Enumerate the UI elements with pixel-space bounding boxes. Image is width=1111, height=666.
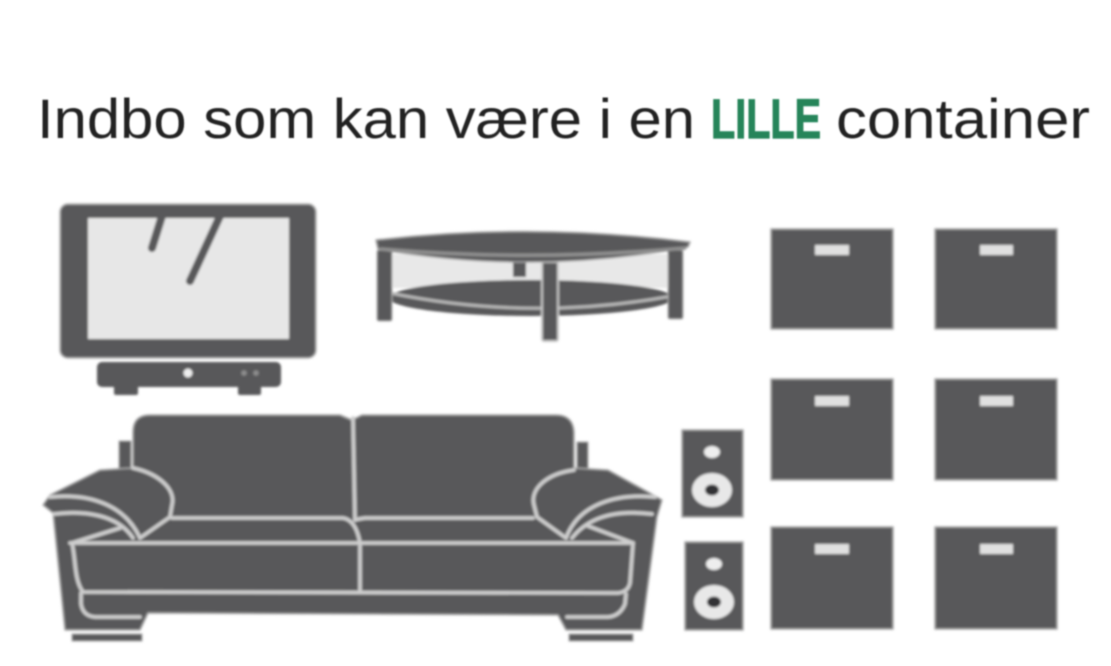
sofa silhouette [43,415,662,630]
title: LILLE [711,87,821,150]
sofa upholstery lines [50,418,655,617]
icon: television with media player [60,204,316,395]
box 2 [935,229,1057,329]
sofa feet [72,634,633,641]
title: Indbo som kan være i en [37,87,695,150]
box 1 [771,229,893,329]
icon: upper speaker [682,430,743,517]
icon: oval coffee table [376,231,690,341]
sofa side posts [119,441,588,474]
icon: lower speaker [685,542,743,630]
icon: sofa [43,415,662,641]
box 6 [935,527,1057,629]
title: container [836,87,1090,150]
box 5 [771,527,893,629]
box 3 [771,379,893,480]
title [37,87,1090,150]
icon: storage boxes [771,229,1057,629]
box 4 [935,379,1057,480]
